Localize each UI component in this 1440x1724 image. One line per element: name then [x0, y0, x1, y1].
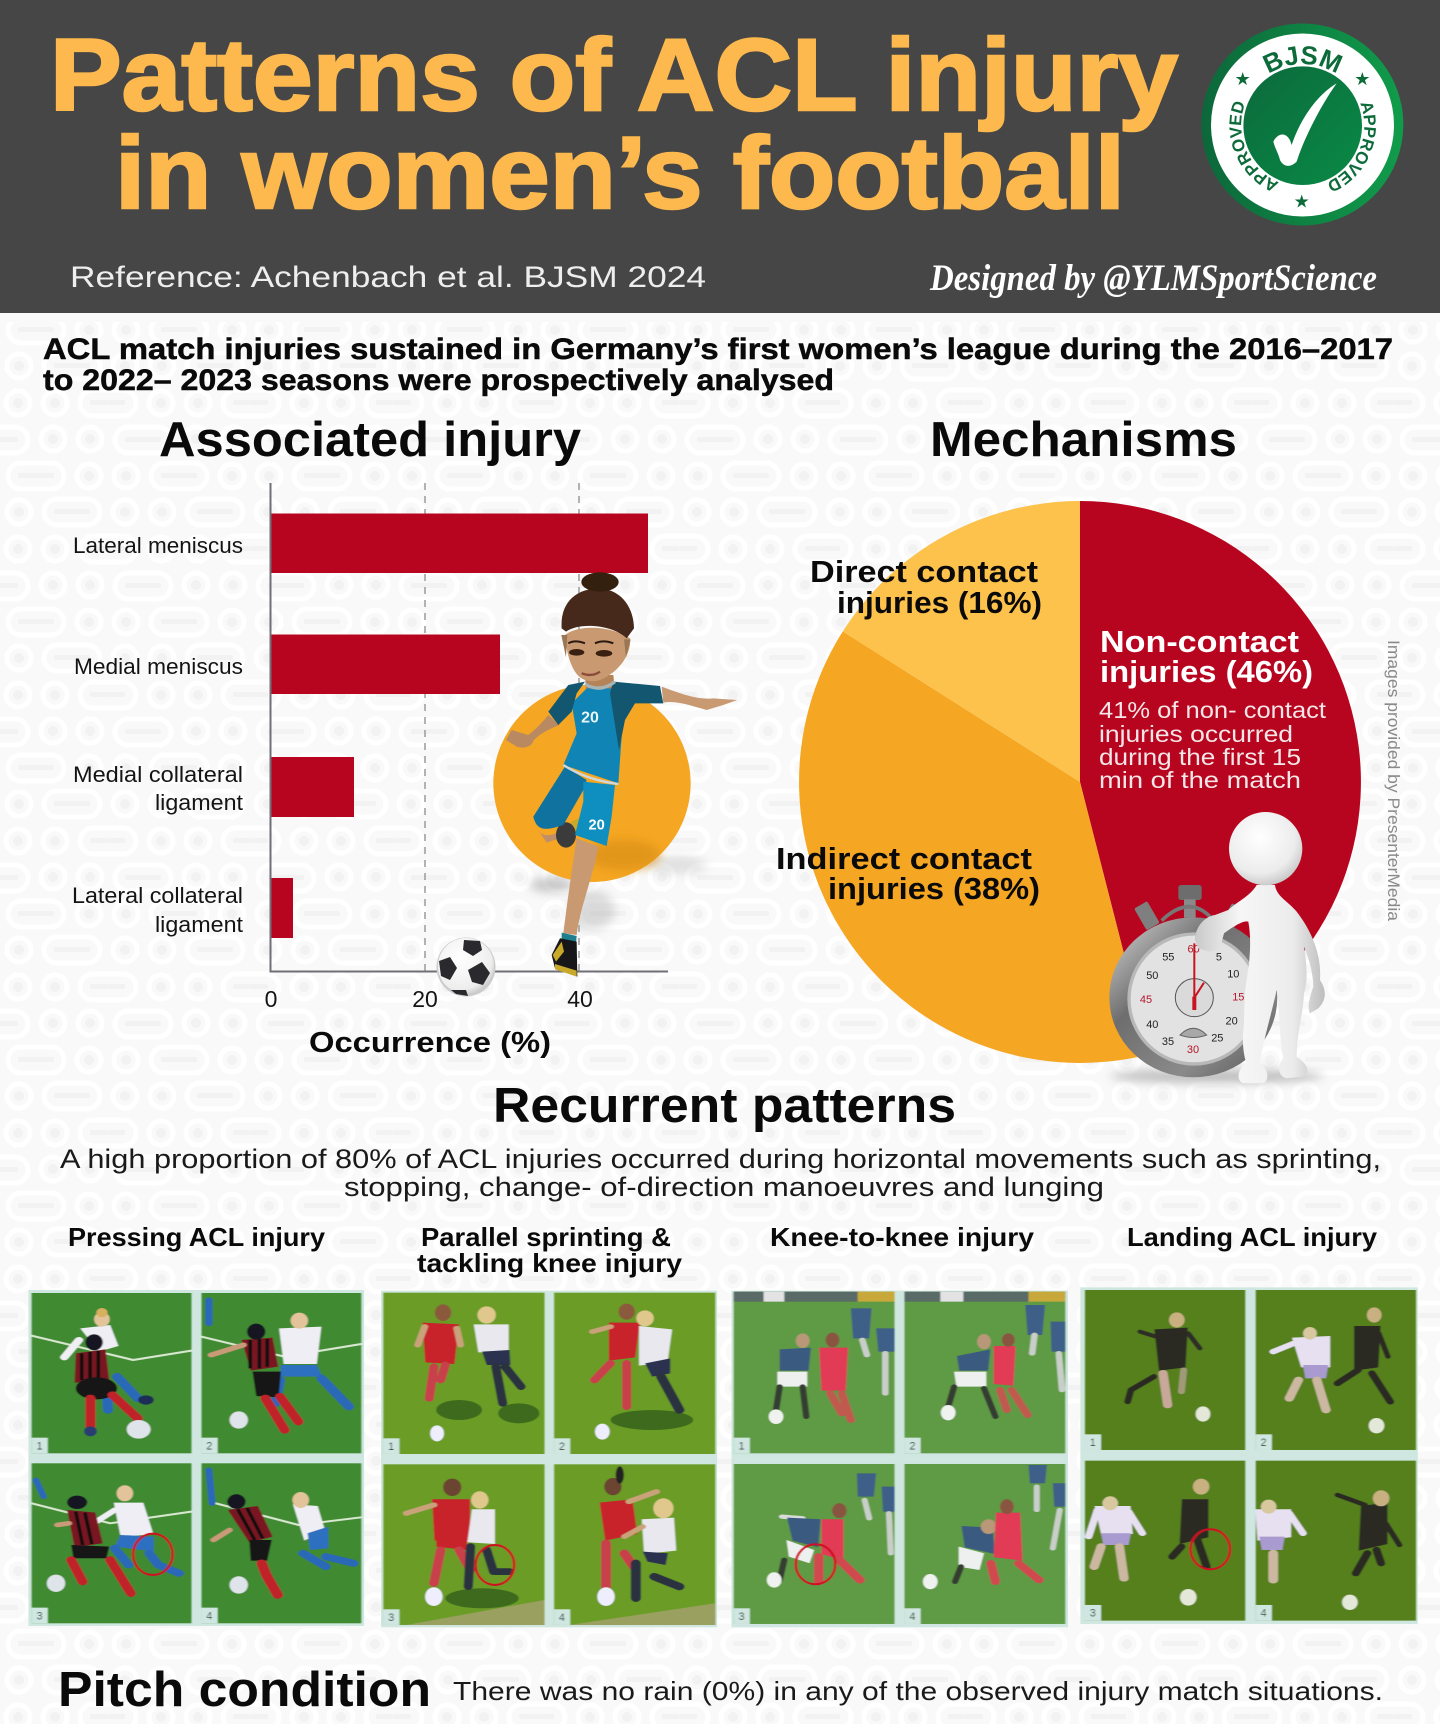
frame 3: 3	[1090, 1608, 1096, 1620]
title: in women’s football	[115, 116, 1125, 230]
pattern headings: Knee-to-knee injury	[770, 1222, 1035, 1252]
note: first 15 minutes	[1099, 697, 1327, 793]
description: recurrent patterns: A high proportion of 80% of ACL injuries occurred during horizontal movements such as sprinting,	[60, 1144, 1381, 1174]
icon: BJSM approved badge: BJSM	[1262, 46, 1343, 73]
category labels: Medial collateral	[73, 762, 243, 787]
frame 1: 1	[388, 1441, 394, 1453]
frame 4: 4	[909, 1611, 915, 1623]
intro text: ACL match injuries sustained in Germany’s first women’s league during the 2016–2017	[43, 333, 1393, 366]
header banner	[0, 0, 1440, 313]
label: non-contact: Non-contact	[1100, 624, 1299, 659]
icon: football	[436, 938, 496, 996]
arms	[662, 687, 737, 710]
frame 3	[1085, 1461, 1245, 1621]
note: first 15 minutes: min of the match	[1099, 767, 1301, 793]
illustration: cartoon footballer with orange circle: 20	[581, 709, 599, 726]
jersey	[563, 688, 622, 783]
frame 2: 2	[206, 1440, 212, 1452]
facial features	[568, 641, 613, 675]
description: recurrent patterns	[60, 1144, 1381, 1202]
frame 2	[1256, 1290, 1416, 1450]
category labels: Lateral collateral	[72, 883, 243, 908]
stopwatch: 10	[1227, 968, 1239, 980]
3D figure	[1195, 812, 1325, 1083]
label: indirect contact: injuries (38%)	[828, 871, 1040, 906]
shorts	[533, 767, 587, 829]
reference line: Reference: Achenbach et al. BJSM 2024	[70, 261, 706, 294]
illustration: figure with stopwatch	[1109, 812, 1325, 1083]
slice: indirect contact 38%	[799, 631, 1150, 1063]
frame 2: 2	[909, 1440, 915, 1452]
stopwatch: 35	[1162, 1036, 1174, 1048]
stopwatch: 20	[1226, 1016, 1238, 1028]
stopwatch: 55	[1162, 952, 1174, 964]
icon: BJSM approved badge	[1201, 24, 1404, 226]
frame 2: 2	[559, 1441, 565, 1453]
label: direct contact	[810, 554, 1042, 620]
frame 1	[1085, 1290, 1245, 1450]
label: non-contact: injuries (46%)	[1100, 654, 1313, 689]
label: indirect contact	[776, 841, 1040, 906]
frame 2	[554, 1293, 715, 1454]
stopwatch: 60	[1188, 943, 1200, 955]
frame 4	[202, 1463, 361, 1623]
intro text	[43, 333, 1393, 397]
slice: direct contact 16%	[843, 501, 1080, 782]
bars	[271, 514, 648, 938]
frame 4	[554, 1464, 715, 1625]
label: indirect contact: Indirect contact	[776, 841, 1032, 876]
pie chart: mechanisms	[776, 501, 1361, 1063]
frame 2: 2	[1261, 1437, 1267, 1449]
category labels	[72, 533, 243, 937]
image credit: Images provided by PresenterMedia	[1384, 640, 1403, 922]
frame 4	[905, 1464, 1065, 1624]
frame 1: 1	[1090, 1437, 1096, 1449]
heading: associated injury: Associated injury	[159, 413, 581, 467]
hair	[561, 572, 634, 657]
stopwatch: 25	[1211, 1033, 1223, 1045]
frame 1	[383, 1293, 544, 1454]
category labels: Medial meniscus	[74, 654, 243, 679]
slice: non-contact 46%	[1080, 501, 1361, 1054]
heading: mechanisms: Mechanisms	[930, 413, 1237, 467]
pattern headings	[68, 1222, 1378, 1278]
category labels: Lateral meniscus	[73, 533, 243, 558]
frame 4	[1255, 1461, 1416, 1621]
designer credit: Designed by @YLMSportScience	[929, 258, 1377, 299]
axis tick labels: 20	[412, 986, 438, 1012]
pitch condition note: There was no rain (0%) in any of the observed injury match situations.	[453, 1676, 1383, 1706]
note: first 15 minutes: injuries occurred	[1099, 721, 1293, 747]
photo panel: landing ACL injury	[1080, 1287, 1418, 1624]
neck	[585, 675, 615, 691]
frame 3: 3	[739, 1611, 745, 1623]
illustration: cartoon footballer with orange circle	[493, 572, 737, 977]
frame 4: 4	[559, 1612, 565, 1624]
stopwatch: 50	[1146, 970, 1158, 982]
icon: BJSM approved badge: ★	[1294, 192, 1310, 212]
frame 1: 1	[36, 1440, 43, 1452]
stopwatch: 15	[1232, 992, 1244, 1004]
frame 3	[383, 1464, 544, 1625]
stopwatch: 30	[1187, 1044, 1199, 1056]
label: direct contact: Direct contact	[810, 554, 1038, 589]
frame 1: 1	[739, 1440, 745, 1452]
photo panel: pressing ACL injury	[28, 1290, 364, 1626]
frame 3	[734, 1464, 894, 1624]
heading: pitch condition: Pitch condition	[58, 1663, 431, 1717]
icon: BJSM approved badge: ★	[1354, 69, 1370, 90]
category labels: ligament	[155, 912, 243, 937]
face	[565, 628, 630, 681]
pattern headings: Parallel sprinting &	[421, 1222, 671, 1252]
frame 3: 3	[388, 1612, 394, 1624]
frame 2	[202, 1293, 361, 1453]
standing leg	[563, 838, 598, 935]
stopwatch: 40	[1146, 1019, 1158, 1031]
frame 1	[734, 1292, 894, 1453]
stopwatch: 45	[1140, 994, 1152, 1006]
pattern headings: Landing ACL injury	[1127, 1222, 1378, 1252]
note: first 15 minutes: 41% of non- contact	[1099, 697, 1327, 723]
pattern headings: Pressing ACL injury	[68, 1222, 326, 1252]
intro text: to 2022– 2023 seasons were prospectively analysed	[43, 364, 834, 397]
pattern headings: tackling knee injury	[417, 1248, 683, 1278]
axis title: Occurrence (%)	[309, 1027, 551, 1059]
frame 4: 4	[206, 1610, 212, 1622]
icon: BJSM approved badge: ★	[1235, 69, 1251, 90]
stopwatch: 5	[1216, 952, 1222, 964]
frame 4: 4	[1261, 1608, 1267, 1620]
axis tick labels	[265, 986, 593, 1012]
category labels: ligament	[155, 790, 243, 815]
illustration: cartoon footballer with orange circle: 20	[588, 817, 605, 833]
icon: BJSM approved badge: APPROVED	[1229, 102, 1279, 191]
icon: BJSM approved badge: APPROVED	[1328, 103, 1376, 191]
bar chart: associated injury	[72, 483, 668, 1059]
axis tick labels: 0	[265, 986, 277, 1012]
description: recurrent patterns: stopping, change- of-direction manoeuvres and lunging	[344, 1172, 1104, 1202]
note: first 15 minutes: during the first 15	[1099, 744, 1301, 770]
title	[50, 18, 1178, 230]
axis tick labels: 40	[567, 986, 593, 1012]
stopwatch	[1109, 885, 1277, 1077]
heading: recurrent patterns: Recurrent patterns	[493, 1079, 956, 1133]
label: non-contact	[1100, 624, 1313, 689]
photo panel: knee-to-knee injury	[731, 1291, 1068, 1627]
boot	[552, 933, 577, 977]
frame 3	[32, 1463, 191, 1623]
frame 3: 3	[36, 1610, 43, 1622]
frame 1	[32, 1293, 191, 1453]
raised leg and foot	[538, 818, 579, 848]
title: Patterns of ACL injury	[50, 18, 1178, 132]
frame 2	[905, 1292, 1065, 1453]
photo panel: parallel sprinting and tackling	[381, 1291, 717, 1627]
label: direct contact: injuries (16%)	[837, 585, 1042, 620]
